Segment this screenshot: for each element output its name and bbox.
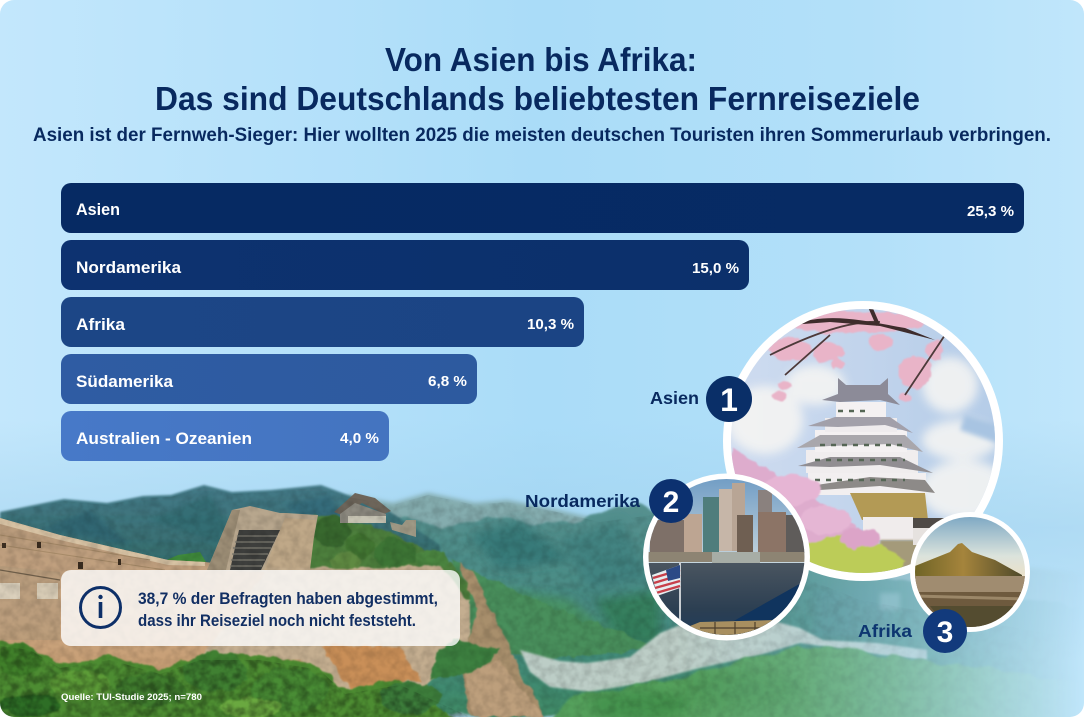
bar: Asien 25,3 % — [61, 183, 1024, 233]
label: Asien 1: Asien — [650, 388, 699, 408]
label: Nordamerika 2: 2 — [663, 486, 679, 519]
bar: Afrika 10,3 %: Afrika — [76, 315, 126, 334]
bar: Asien 25,3 %: Asien — [76, 200, 120, 219]
label: Afrika 3: 3 — [937, 616, 953, 649]
bar: Südamerika 6,8 %: 6,8 % — [428, 374, 467, 390]
icon: info — [80, 588, 120, 628]
source note: Quelle: TUI-Studie 2025; n=780 — [61, 692, 202, 703]
label: Afrika 3: Afrika — [858, 621, 912, 641]
small green bush — [167, 552, 206, 562]
rock cliff — [458, 563, 543, 717]
left mountains — [0, 484, 440, 563]
bar: Nordamerika 15,0 %: 15,0 % — [692, 261, 739, 277]
bar: Nordamerika 15,0 %: Nordamerika — [76, 258, 182, 277]
bar: Nordamerika 15,0 % — [61, 240, 749, 290]
bar: Südamerika 6,8 %: Südamerika — [76, 372, 174, 391]
bar: Australien - Ozeanien 4,0 %: Australien - Ozeanien — [76, 429, 252, 448]
title — [157, 47, 919, 110]
far mountains right — [348, 493, 1084, 717]
bar: Asien 25,3 %: 25,3 % — [967, 204, 1014, 220]
photo circle: Asien castle — [723, 301, 1010, 585]
bar: Australien - Ozeanien 4,0 % — [61, 411, 389, 461]
green slope right of cliff — [450, 560, 660, 660]
castle — [797, 378, 944, 572]
callout: info box: 38,7 % der Befragten haben abgestimmt, — [138, 590, 438, 608]
distant wall, winding — [520, 593, 927, 692]
pagoda — [334, 493, 416, 537]
cherry blossoms — [725, 311, 943, 585]
flag — [652, 562, 681, 620]
photo circle: Afrika mountain — [910, 512, 1030, 632]
landscape: Great Wall photo — [0, 480, 1084, 717]
callout: info box — [61, 570, 460, 646]
photo circle: Nordamerika skyline — [643, 474, 810, 640]
bar: Australien - Ozeanien 4,0 %: 4,0 % — [340, 431, 379, 447]
bar: Afrika 10,3 % — [61, 297, 584, 347]
lower right forest — [540, 645, 1084, 717]
callout: info box: dass ihr Reiseziel noch nicht feststeht. — [138, 612, 416, 630]
label: Nordamerika 2: Nordamerika — [525, 491, 640, 511]
subtitle: Asien ist der Fernweh-Sieger: Hier wollten 2025 die meisten deutschen Touristen ihren Sommerurlaub verbringen. — [33, 125, 1051, 146]
wall, left section — [0, 518, 305, 672]
bar chart — [61, 183, 1024, 461]
skyscrapers — [650, 483, 806, 554]
pier — [690, 620, 772, 635]
label: Asien 1 — [650, 376, 752, 422]
foliage grain — [0, 646, 468, 717]
stair tower — [207, 506, 318, 572]
bar: Südamerika 6,8 % — [61, 354, 477, 404]
hill vegetation near pagoda — [300, 515, 470, 600]
bar: Afrika 10,3 %: 10,3 % — [527, 317, 574, 333]
label: Nordamerika 2 — [525, 479, 693, 523]
mid mountains right — [390, 505, 1084, 717]
label: Afrika 3 — [858, 609, 967, 653]
title: Von Asien bis Afrika: — [385, 41, 697, 78]
foreground vegetation — [0, 640, 470, 717]
label: Asien 1: 1 — [720, 382, 738, 418]
cliff behind callout — [200, 566, 470, 695]
title: Das sind Deutschlands beliebtesten Fernreiseziele — [155, 80, 920, 117]
